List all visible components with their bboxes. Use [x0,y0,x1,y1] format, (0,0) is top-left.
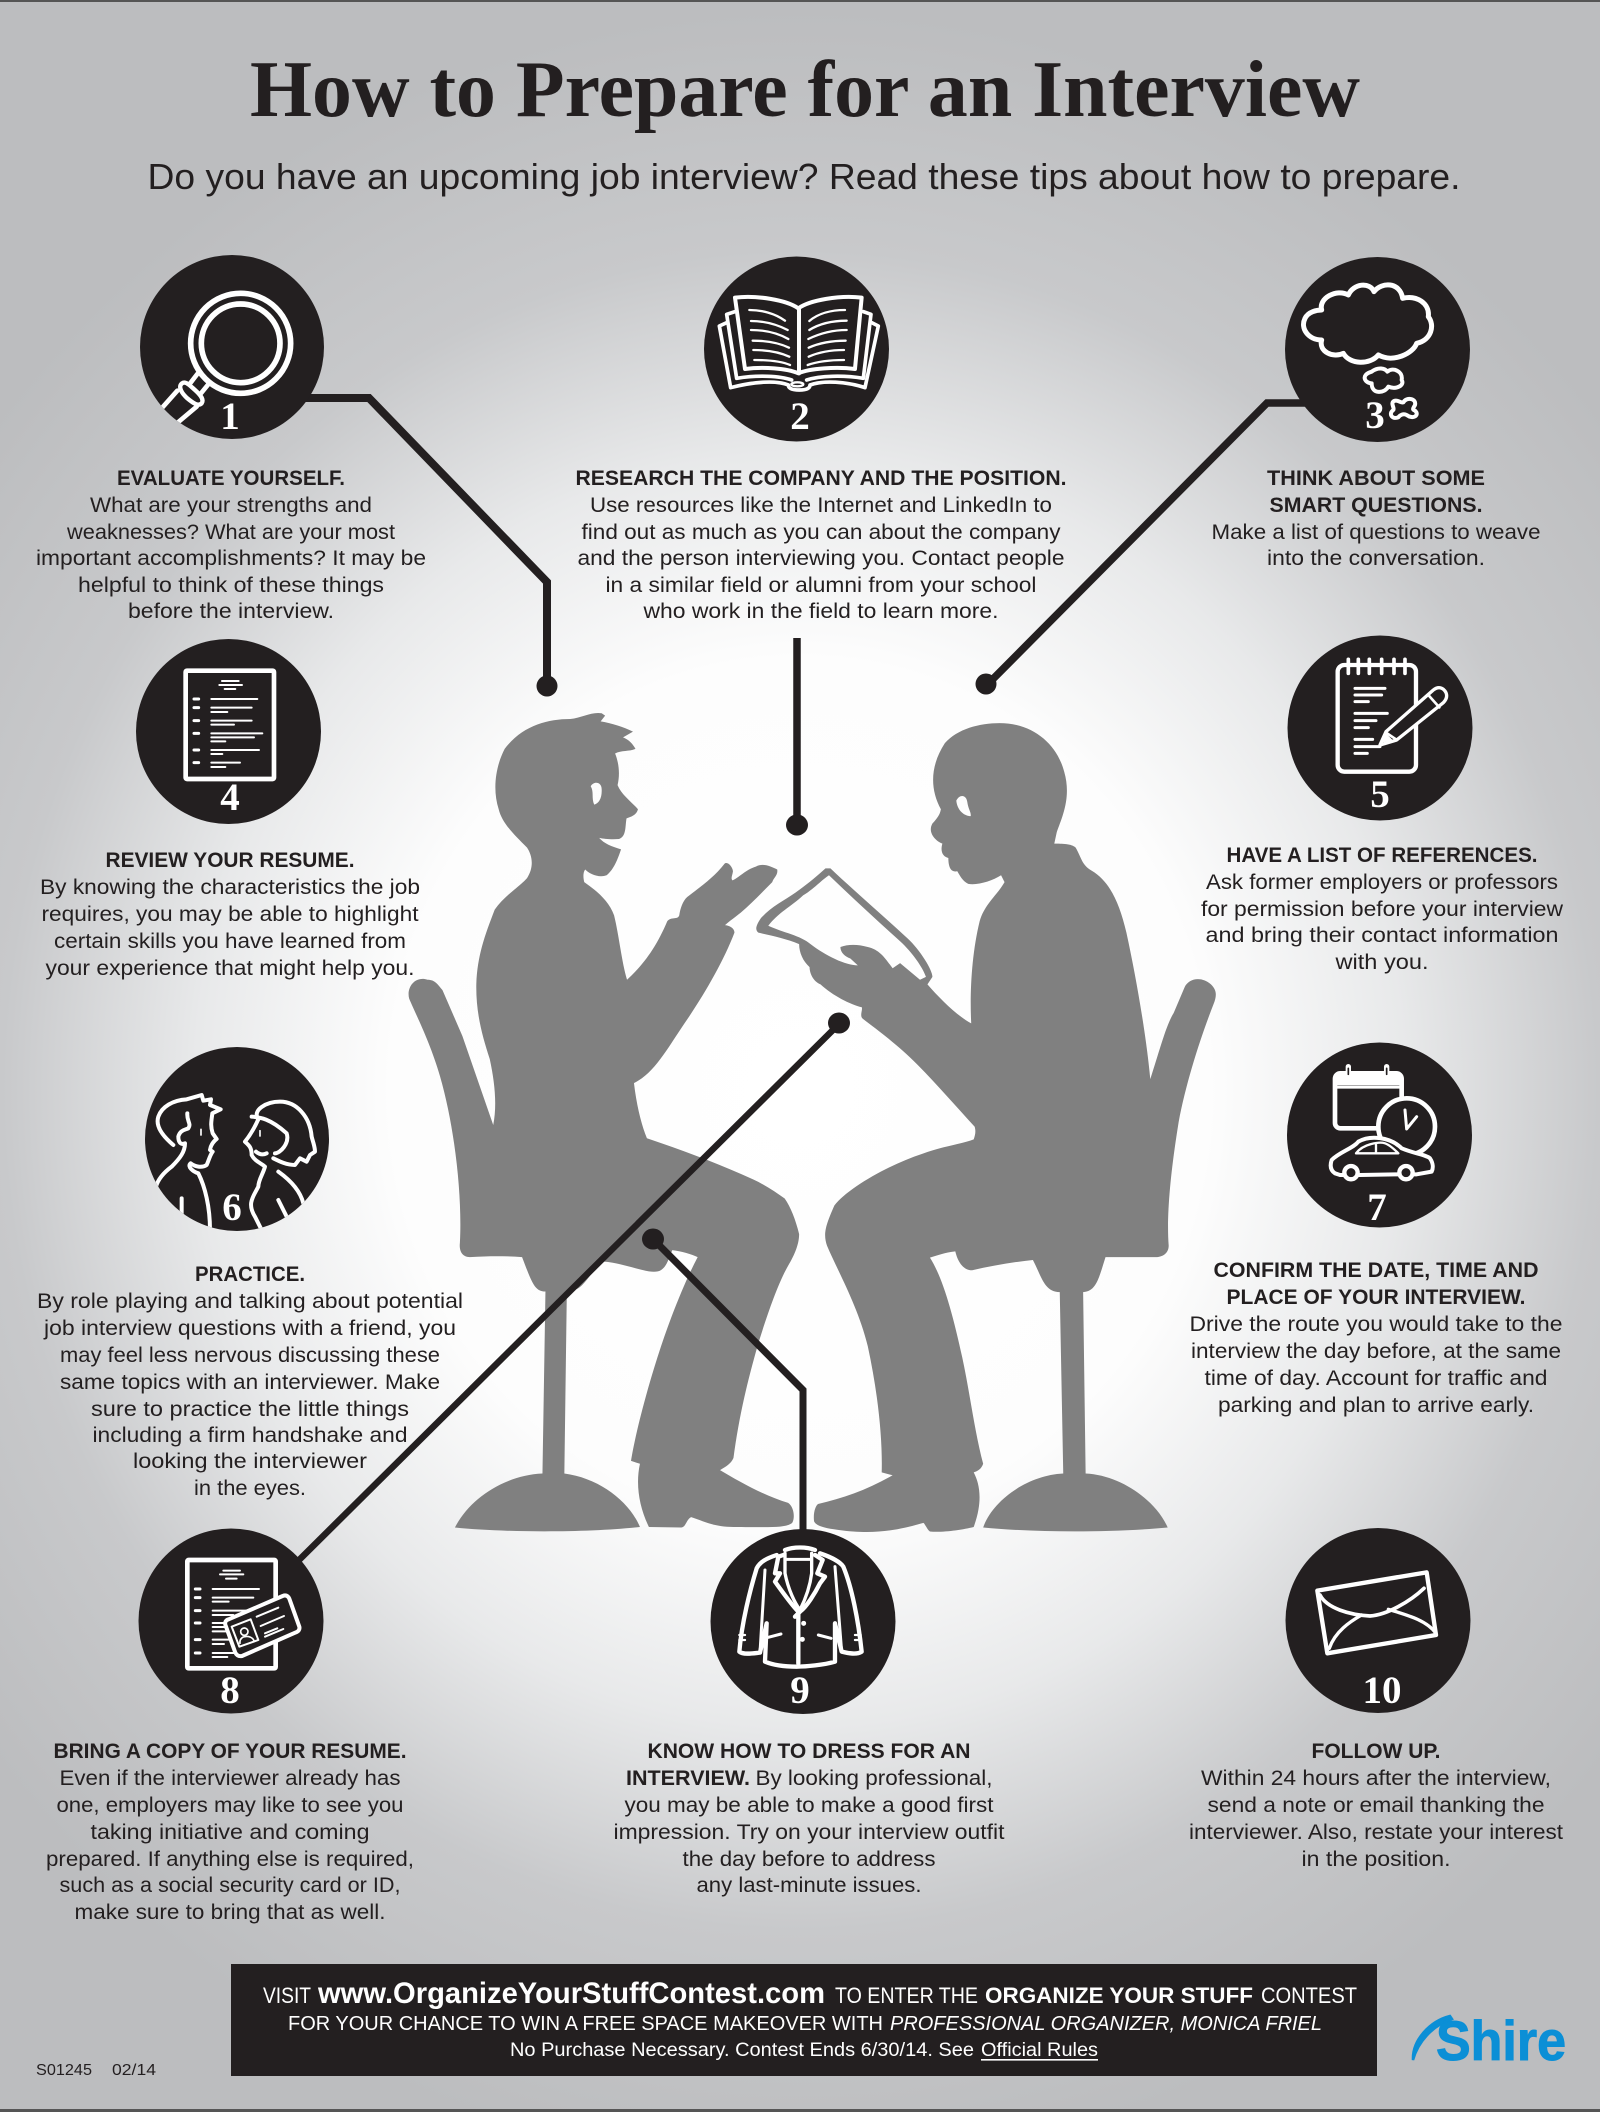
logo: Shire: Shire [1436,2009,1566,2072]
body text: time of day. Account for traffic and [1204,1367,1548,1390]
body text: for permission before your interview [1201,898,1564,921]
banner line 1: ORGANIZE YOUR STUFF [985,1983,1253,2008]
body text: your experience that might help you. [46,957,414,980]
silhouette: candidate on chair [409,713,799,1531]
connector line: tip 2 to center [786,638,808,836]
connector line: tip 8 to resume [290,1012,850,1569]
panel: tip 7 confirm date time place [1190,1042,1562,1417]
body text: Drive the route you would take to the [1190,1313,1562,1336]
panel: tip 10 follow up [1189,1528,1563,1871]
heading: SMART QUESTIONS. [1270,494,1482,517]
heading: THINK ABOUT SOME [1267,467,1485,490]
body text [36,494,426,623]
illustration: two seated people in silhouette [409,713,1216,1532]
heading: FOLLOW UP. [1312,1740,1440,1763]
body text: Ask former employers or professors [1206,871,1558,894]
body text: including a firm handshake and [92,1424,408,1447]
body text: job interview questions with a friend, you [43,1317,456,1340]
body text: Make a list of questions to weave [1212,521,1540,544]
connector line: tip 1 to candidate [295,398,558,696]
icon: notepad and pencil: 5 [1370,773,1390,816]
panel: tip 5 list of references [1201,636,1564,974]
body text: By looking professional, [756,1767,992,1790]
icon: envelope [1286,1528,1470,1713]
body text: before the interview. [128,600,334,623]
body text: requires, you may be able to highlight [42,903,419,926]
icon: calendar, clock and car [1287,1042,1472,1229]
body text: Within 24 hours after the interview, [1201,1767,1551,1790]
panel: tip 9 dress for an interview [614,1529,1005,1897]
icon: resume with ID card [138,1528,324,1714]
banner line 1: www.OrganizeYourStuffContest.com [317,1977,825,2010]
body text: parking and plan to arrive early. [1218,1394,1534,1417]
subtitle: Do you have an upcoming job interview? Read these tips about how to prepare. [148,156,1460,197]
banner line 3: No Purchase Necessary. Contest Ends 6/30/14. See [510,2040,974,2061]
body text: helpful to think of these things [78,574,384,597]
title: How to Prepare for an Interview [250,46,1360,134]
body text: prepared. If anything else is required, [46,1848,414,1871]
heading: KNOW HOW TO DRESS FOR AN [648,1740,970,1763]
body text: one, employers may like to see you [56,1794,404,1817]
body text: such as a social security card or ID, [60,1874,400,1897]
icon: resume document [136,639,321,824]
body text: in the eyes. [194,1477,306,1500]
connector line: tip 9 to clothes [642,1228,803,1540]
banner line 2 [288,2013,1322,2035]
body text [46,1767,414,1924]
banner line 1: TO ENTER THE [835,1983,978,2008]
body text: important accomplishments? It may be [36,547,426,570]
body text: looking the interviewer [133,1450,367,1473]
document code [36,2062,156,2079]
icon: magnifying glass [140,255,324,439]
heading [1214,1259,1538,1309]
banner line 3: Official Rules [981,2040,1098,2061]
panel: tip 8 bring a copy of your resume [46,1528,414,1924]
panel: tip 2 research the company [576,256,1066,623]
body text: What are your strengths and [90,494,372,517]
banner line 2: PROFESSIONAL ORGANIZER, MONICA FRIEL [890,2013,1322,2035]
body text: INTERVIEW. [626,1767,750,1790]
body text: Use resources like the Internet and LinkedIn to [590,494,1052,517]
icon: magnifying glass: 1 [220,395,240,438]
icon: open book [704,256,889,442]
body text: and the person interviewing you. Contact people [578,547,1064,570]
panel: tip 6 practice [37,1047,463,1500]
body text: weaknesses? What are your most [66,521,395,544]
heading: REVIEW YOUR RESUME. [106,849,354,872]
document code: S01245 [36,2062,92,2079]
icon: notepad and pencil [1288,636,1472,820]
body text [1189,1767,1563,1871]
body text [1212,521,1540,570]
body text: may feel less nervous discussing these [60,1344,440,1367]
body text: in a similar field or alumni from your school [606,574,1036,597]
contest banner [231,1964,1377,2076]
icon: thought cloud: 3 [1365,394,1385,437]
body text: send a note or email thanking the [1208,1794,1544,1817]
heading: BRING A COPY OF YOUR RESUME. [54,1740,406,1763]
body text: sure to practice the little things [91,1398,409,1421]
body text: in the position. [1302,1848,1450,1871]
icon: thought cloud [1285,257,1470,442]
heading: EVALUATE YOURSELF. [117,467,345,490]
body text: By role playing and talking about potential [37,1290,463,1313]
icon: calendar, clock and car: 7 [1367,1186,1387,1229]
icon: two people talking: 6 [222,1186,242,1229]
heading: PLACE OF YOUR INTERVIEW. [1226,1286,1526,1309]
body text: and bring their contact information [1206,924,1558,947]
heading: PRACTICE. [195,1263,305,1286]
body text [578,494,1064,623]
body text: By knowing the characteristics the job [40,876,420,899]
body text: same topics with an interviewer. Make [60,1371,440,1394]
heading [1267,467,1485,517]
icon: suit jacket [710,1529,896,1714]
banner line 2: FOR YOUR CHANCE TO WIN A FREE SPACE MAKEOVER WITH [288,2013,883,2035]
body text [1190,1313,1562,1417]
body text: find out as much as you can about the company [582,521,1061,544]
icon: two people talking [145,1047,329,1231]
panel: tip 4 review your resume [40,639,420,980]
body text [37,1290,463,1500]
silhouette: interviewer holding resume on chair [756,723,1216,1532]
banner line 1: CONTEST [1261,1983,1357,2008]
banner line 1: VISIT [263,1983,311,2008]
panel: tip 3 smart questions [1212,257,1540,570]
body text: with you. [1334,951,1428,974]
body text: into the conversation. [1267,547,1485,570]
panel: tip 1 evaluate yourself [36,255,426,623]
icon: envelope: 10 [1362,1669,1402,1712]
document code: 02/14 [112,2062,156,2079]
body text [614,1767,1005,1897]
connector line: tip 3 to interviewer [976,403,1305,694]
heading: RESEARCH THE COMPANY AND THE POSITION. [576,467,1066,490]
body text [40,876,420,980]
heading: CONFIRM THE DATE, TIME AND [1214,1259,1538,1282]
body text: make sure to bring that as well. [74,1901,386,1924]
icon: resume with ID card: 8 [220,1669,240,1712]
body text: who work in the field to learn more. [642,600,998,623]
icon: resume document: 4 [220,776,240,819]
icon: suit jacket: 9 [790,1669,810,1712]
body text: any last-minute issues. [696,1874,922,1897]
heading: HAVE A LIST OF REFERENCES. [1226,844,1538,867]
body text: Even if the interviewer already has [60,1767,400,1790]
body text: interviewer. Also, restate your interest [1189,1821,1563,1844]
body text [1201,871,1564,974]
icon: open book: 2 [790,395,810,438]
body text: taking initiative and coming [90,1821,370,1844]
body text: certain skills you have learned from [54,930,406,953]
body text: interview the day before, at the same [1191,1340,1561,1363]
body text: you may be able to make a good first [624,1794,994,1817]
banner line 1 [263,1977,1357,2010]
body text: impression. Try on your interview outfit [614,1821,1005,1844]
body text: the day before to address [682,1848,936,1871]
